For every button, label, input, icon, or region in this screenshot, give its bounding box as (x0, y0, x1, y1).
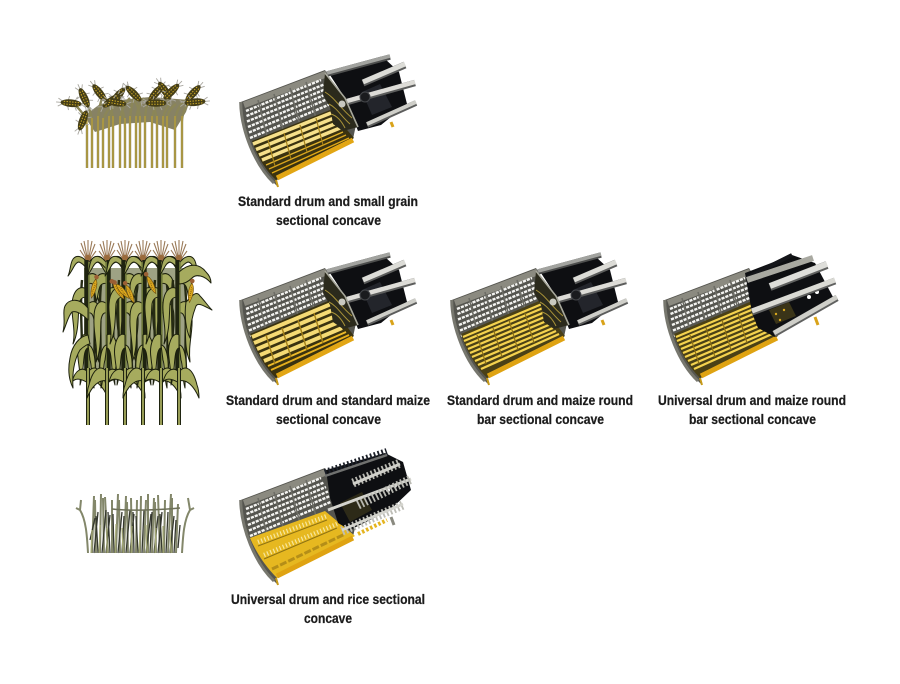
label: standard drum and standard maize: sectional concave (276, 411, 381, 427)
rice concave fingers (250, 511, 355, 578)
label: universal drum and maize round bar: bar sectional concave (689, 411, 816, 427)
label: standard drum and small grain: sectional concave (276, 212, 381, 228)
row 3 crop: rice plants (76, 494, 194, 553)
row 2 crop: maize plants (63, 240, 212, 425)
row 2 drum: standard drum and standard maize concave (241, 254, 416, 385)
universal drum body (745, 255, 837, 337)
label: standard drum and maize round bar: Standard drum and maize round (447, 392, 633, 408)
rice drum with spike bars (325, 452, 411, 534)
label: standard drum and small grain: Standard drum and small grain (238, 193, 418, 209)
row 1 drum: standard drum and small grain concave (241, 56, 416, 187)
label: universal drum and rice: Universal drum and rice sectional (231, 591, 425, 607)
label: universal drum and maize round bar: Universal drum and maize round (658, 392, 846, 408)
row 2 drum: universal drum and maize round bar concave (665, 255, 837, 385)
row 1 crop: wheat plants (55, 74, 211, 168)
label: universal drum and rice: concave (304, 610, 352, 626)
label: standard drum and maize round bar: bar sectional concave (477, 411, 604, 427)
row 2 drum: standard drum and maize round bar concave (452, 254, 627, 385)
row 3 drum: universal drum and rice concave (241, 452, 411, 585)
label: standard drum and standard maize: Standard drum and standard maize (226, 392, 430, 408)
